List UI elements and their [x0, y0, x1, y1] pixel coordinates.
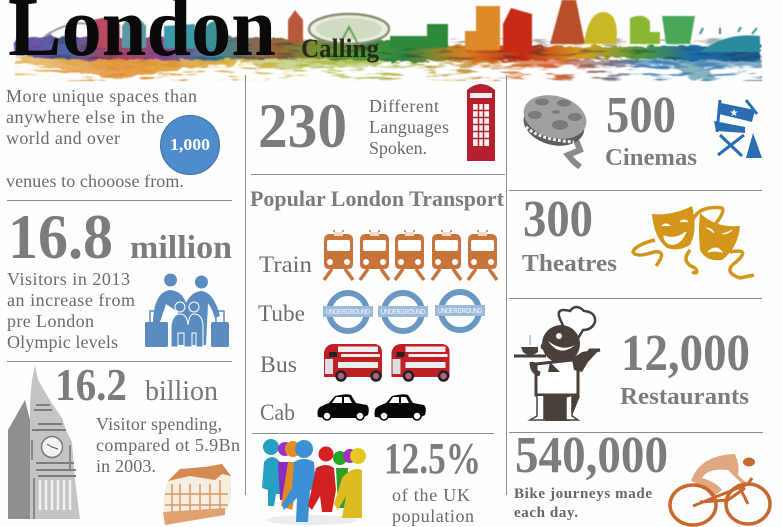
- icon: roundel 3: UNDERGROUND: [438, 308, 482, 315]
- text block: in 2003.: [96, 456, 156, 476]
- text block: anywhere else in the: [6, 107, 164, 127]
- text block: pre London: [7, 311, 94, 331]
- stat: 540,000: 540,000: [515, 427, 668, 484]
- icon: Globe Theatre: [163, 464, 231, 525]
- panel: cinemas: [519, 87, 762, 171]
- stat: 12,000: 12,000: [621, 325, 750, 382]
- row: cab: [260, 394, 426, 425]
- column dividers: [7, 75, 763, 495]
- stat: 16.2 billion: [55, 359, 218, 410]
- stat: 16.2 billion: 16.2: [55, 359, 127, 410]
- icon: roundel 3: [435, 292, 485, 330]
- row: bus: [260, 344, 450, 380]
- stat: 12.5%: 12.5%: [384, 434, 481, 483]
- panel: visitors: [7, 201, 232, 352]
- icon: train 5: [468, 230, 497, 280]
- panel: population: [262, 434, 481, 526]
- stat: 16.8 million: million: [130, 230, 232, 266]
- circle: 1,000: 1,000: [170, 135, 210, 154]
- text block: population: [392, 506, 474, 526]
- icon: roundel 1: [323, 293, 373, 331]
- panel: languages: [258, 84, 495, 161]
- text block: Visitor spending,: [96, 414, 222, 434]
- text block: an increase from: [7, 290, 135, 310]
- text block: world and over: [6, 128, 120, 148]
- icon: film reel: [519, 88, 591, 167]
- label: Restaurants: [620, 384, 749, 410]
- icon: roundel 2: [378, 293, 428, 331]
- row: cab: Cab: [260, 400, 295, 425]
- icon: coloured crowd: [262, 439, 366, 525]
- panel: transport: [250, 186, 505, 425]
- panel: visitor spending: [8, 359, 240, 525]
- bridge arc: [45, 23, 88, 36]
- icon: cyclist: [670, 454, 770, 525]
- London Eye: [309, 14, 389, 44]
- circle: 1,000: [160, 116, 220, 174]
- icon: roundel 2: UNDERGROUND: [381, 309, 425, 316]
- icon: phone box: [467, 84, 495, 161]
- icon: director chair: [714, 100, 762, 158]
- panel: bike journeys: [514, 427, 770, 525]
- row: tube: Tube: [258, 301, 305, 326]
- panel: unique spaces: [6, 86, 220, 191]
- header skyline: [8, 0, 762, 81]
- text block: of the UK: [392, 485, 470, 505]
- icon: train 3: [395, 230, 424, 280]
- stat: 16.2 billion: billion: [145, 376, 218, 407]
- stat: 16.8 million: 16.8: [8, 201, 113, 272]
- icon: cab 1: [318, 394, 369, 420]
- icon: train 2: [360, 230, 389, 280]
- text block: Visitors in 2013: [7, 269, 130, 289]
- text block: compared ot 5.9Bn: [96, 435, 240, 455]
- label: Theatres: [522, 251, 617, 277]
- dark mottling: [15, 38, 762, 60]
- watercolour band: [15, 37, 760, 62]
- icon: chef: [514, 307, 600, 421]
- icon: family with suitcases: [145, 274, 229, 347]
- icon: train 4: [432, 230, 461, 280]
- row: train: Train: [259, 252, 313, 277]
- subtitle: Calling: [301, 34, 379, 63]
- row: train: [259, 230, 497, 280]
- icon: Big Ben: [8, 365, 80, 519]
- icon: bus 2: [392, 344, 450, 380]
- icon: cab 2: [374, 394, 426, 420]
- stat: 230: 230: [258, 90, 347, 161]
- panel: restaurants: [514, 307, 750, 421]
- text block: More unique spaces than: [6, 86, 197, 106]
- text block: Different: [369, 96, 439, 116]
- stat: 500: 500: [606, 87, 676, 144]
- icon: roundel 1: UNDERGROUND: [326, 309, 370, 316]
- stat: 300: 300: [523, 191, 593, 248]
- text block: Olympic levels: [7, 332, 118, 352]
- panel: theatres: [522, 191, 754, 278]
- icon: director chair: ★: [730, 108, 739, 119]
- text block: each day.: [514, 505, 578, 521]
- skyline buildings: [92, 0, 760, 52]
- icon: bus 1: [324, 344, 382, 380]
- row: tube: [258, 292, 485, 331]
- row: bus: Bus: [260, 352, 297, 377]
- text block: Bike journeys made: [514, 486, 652, 502]
- icon: theatre masks: [633, 206, 754, 278]
- label: Cinemas: [605, 145, 697, 171]
- icon: train 1: [324, 230, 353, 280]
- text block: Spoken.: [369, 138, 427, 158]
- stat: 16.8 million: [8, 201, 232, 272]
- heading: Popular London Transport: [250, 186, 505, 211]
- watercolour splashes: [15, 54, 762, 81]
- text block: Languages: [369, 117, 449, 137]
- text block: venues to chooose from.: [6, 171, 184, 191]
